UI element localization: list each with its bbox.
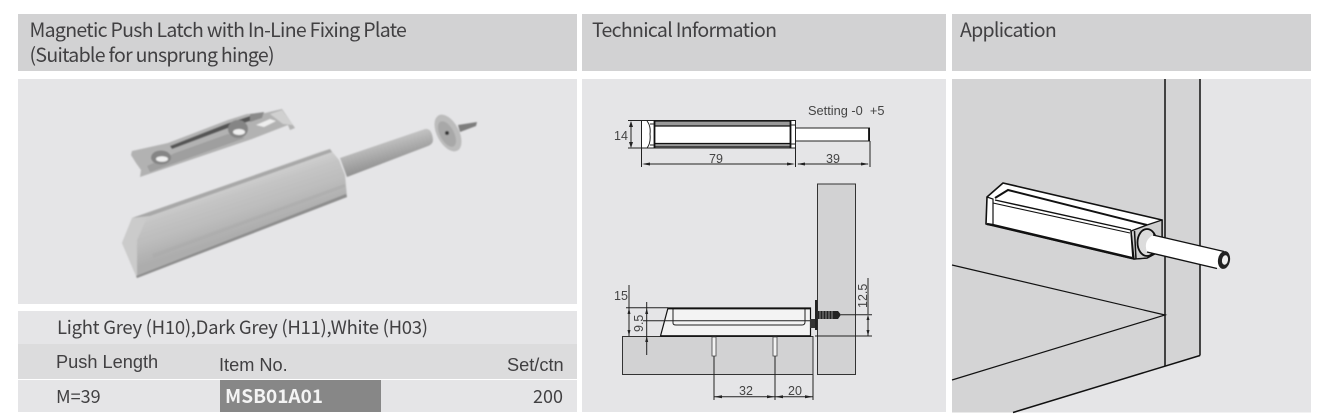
table header row: Item No.	[219, 355, 288, 375]
table data row	[18, 380, 577, 412]
drawing: side section with dimensions: 9.5	[632, 315, 646, 332]
panel: technical information	[582, 79, 946, 412]
drawing: latch top view with dimensions: Setting -0 +5	[808, 103, 884, 118]
header: product title: (Suitable for unsprung hinge)	[30, 39, 274, 68]
panel: colour options: Light Grey (H10),Dark Grey (H11),White (H03)	[57, 314, 428, 340]
table header row: Push Length	[56, 352, 158, 372]
icon: latch body with pin	[122, 129, 433, 278]
header: application: Application	[960, 14, 1056, 43]
table data row: M=39	[56, 383, 101, 409]
drawing: side section with dimensions: 20	[788, 384, 802, 398]
panel: application	[952, 79, 1311, 412]
table data row: 200	[533, 383, 563, 409]
drawing: side section with dimensions	[614, 184, 872, 400]
panel: product photo	[18, 79, 577, 304]
icon: screw with washer	[429, 110, 477, 156]
table header row: Set/ctn	[507, 355, 564, 375]
header: application	[952, 14, 1311, 71]
table header row	[18, 344, 577, 379]
drawing: latch top view with dimensions: 14	[614, 129, 628, 143]
drawing: latch top view with dimensions: 39	[826, 152, 840, 166]
drawing: side section with dimensions: 12.5	[856, 284, 870, 308]
header: technical information: Technical Information	[592, 14, 776, 43]
header: product title: Magnetic Push Latch with In-Line Fixing Plate	[30, 14, 406, 43]
header: product title	[18, 14, 577, 71]
table data row: MSB01A01	[225, 382, 323, 409]
drawing: latch top view with dimensions	[614, 103, 884, 167]
drawing: side section with dimensions: 32	[739, 384, 753, 398]
panel: colour options	[18, 311, 577, 344]
latch illustration	[986, 183, 1231, 270]
cabinet illustration	[952, 79, 1200, 412]
header: technical information	[582, 14, 946, 71]
drawing: side section with dimensions: 15	[614, 289, 628, 303]
icon: fixing plate	[131, 109, 295, 177]
drawing: latch top view with dimensions: 79	[709, 152, 723, 166]
